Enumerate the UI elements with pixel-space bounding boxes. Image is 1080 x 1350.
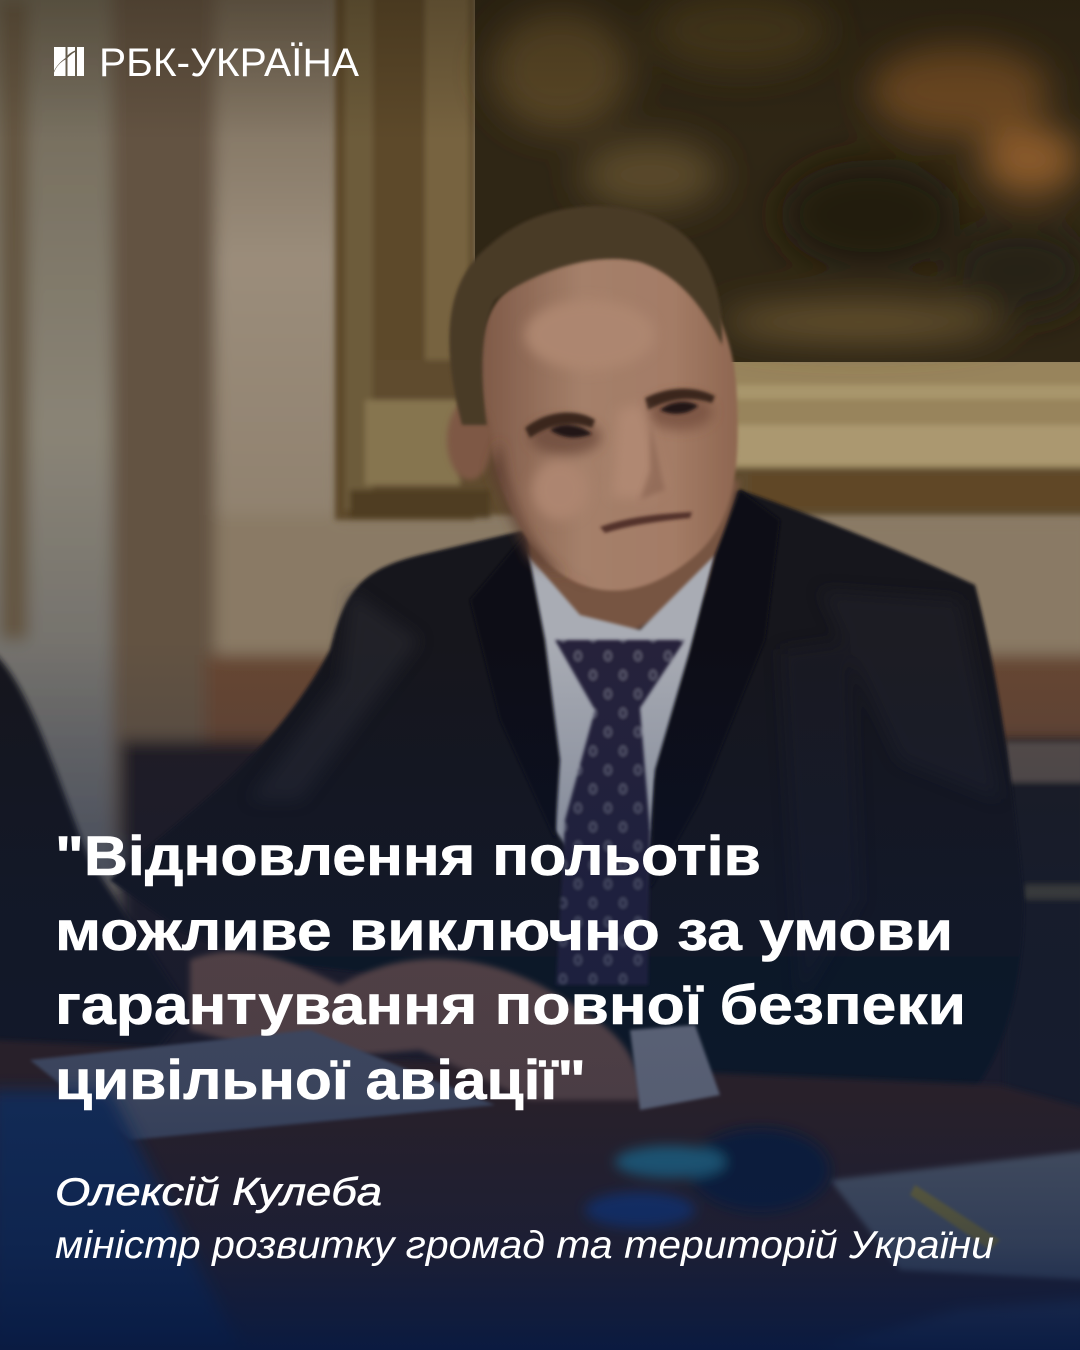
table and foreground objects [0,952,1080,1350]
icon: logo mark [54,47,84,76]
chair at right edge [1005,740,1080,1110]
painting frame [335,0,1080,520]
quote heading [55,824,966,1111]
attribution: speaker name: Олексій Кулеба [55,1171,382,1214]
attribution: speaker role: міністр розвитку громад та територій України [55,1224,994,1267]
painting canvas [475,0,1080,362]
head [478,255,738,591]
ear [447,400,493,480]
dark navy gradient overlay [0,640,1080,1350]
hair [449,206,722,425]
suit highlights [250,590,1000,1000]
quote heading: "Відновлення польотів [55,824,761,887]
quote heading: можливе виключно за умови [55,899,953,962]
blue object [585,1128,830,1228]
left foreground person [0,650,190,1070]
lapels [470,535,560,840]
quote heading: гарантування повної безпеки [55,973,966,1036]
suit jacket [110,490,1024,1110]
logo wordmark: РБК-УКРАЇНА [99,41,360,85]
shirt [525,552,715,950]
shirt cuff [630,1025,720,1110]
logo: РБК-Україна [54,41,360,85]
top shade overlay [0,0,1080,140]
papers on table [30,1030,495,1140]
neck [525,480,740,640]
man in suit [110,206,1024,1110]
face details [490,300,715,585]
hands [190,952,640,1100]
quote heading: цивільної авіації" [55,1048,586,1111]
tie [555,640,685,985]
